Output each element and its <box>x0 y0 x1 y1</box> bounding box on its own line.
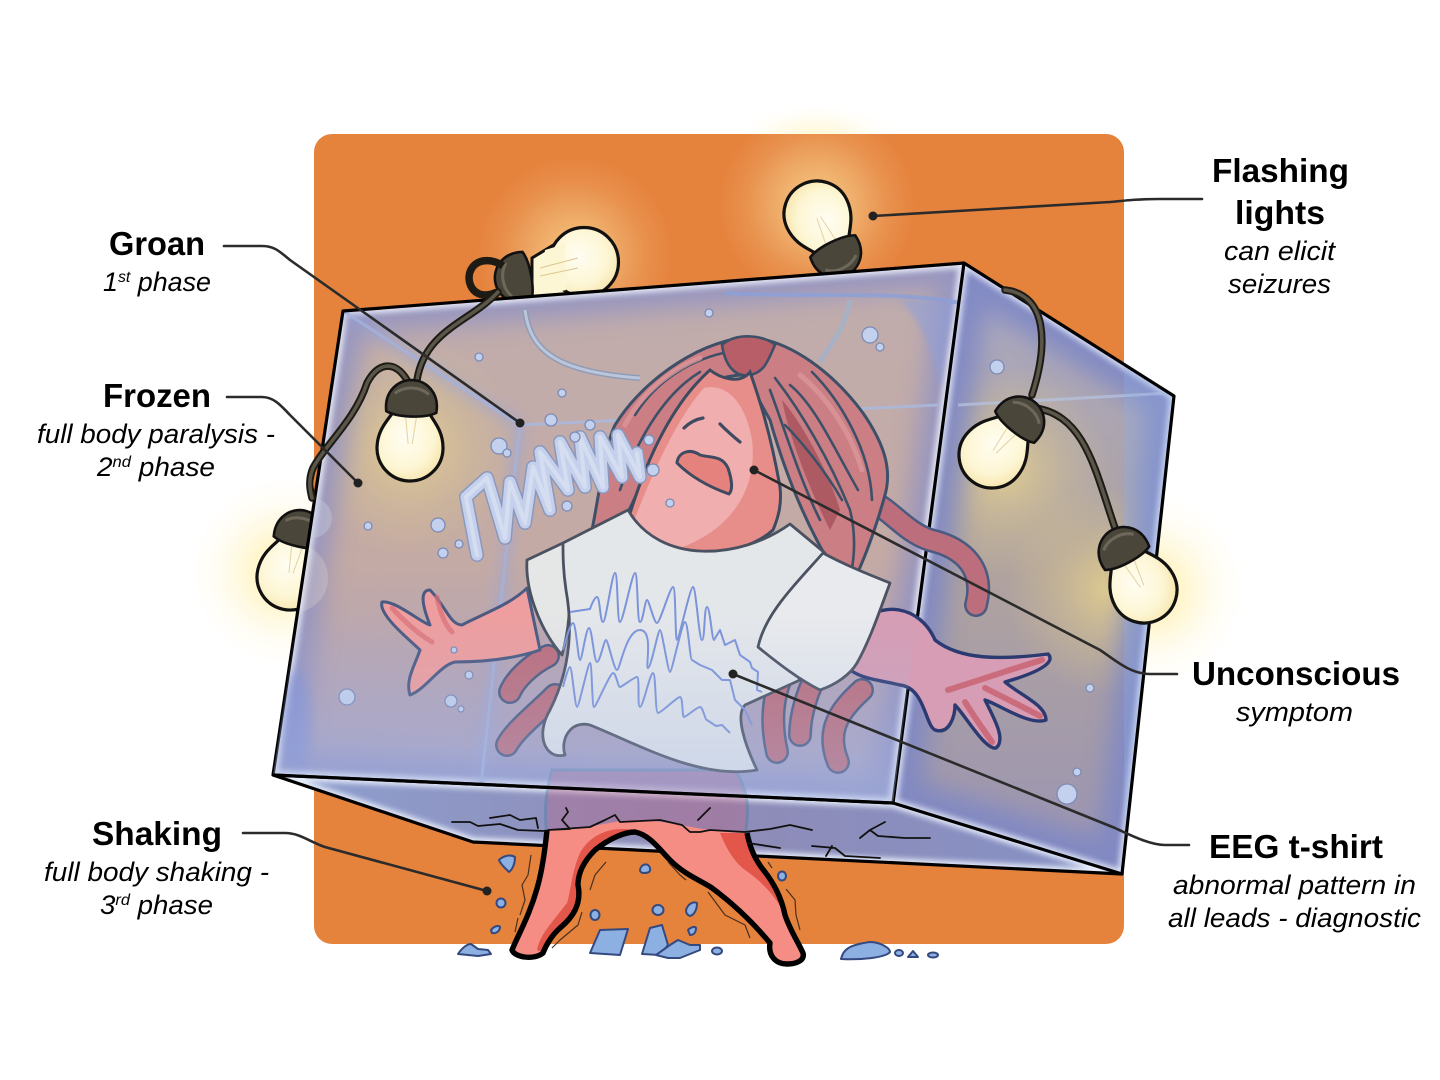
label: EEG t-shirt <box>1168 828 1422 933</box>
character: right arm <box>850 609 1050 748</box>
label: Frozen: Frozen <box>103 377 211 414</box>
label: Groan: 1 <box>103 267 118 297</box>
bulb: top <box>773 170 876 290</box>
label: Shaking: Shaking <box>92 815 222 852</box>
label: Groan: st <box>118 269 131 286</box>
label: Flashing lights: Flashing <box>1212 152 1349 189</box>
cracks on panel <box>515 855 800 948</box>
legs <box>512 820 803 964</box>
orange panel <box>314 134 1124 944</box>
character: head and neck <box>628 370 781 553</box>
ice cube back faces <box>262 263 1215 880</box>
label: EEG t-shirt: EEG t-shirt <box>1209 828 1383 865</box>
label: Flashing lights: seizures <box>1228 269 1331 299</box>
bulb: right lower <box>1083 514 1189 635</box>
label: Shaking: rd <box>115 892 131 909</box>
leader: groan <box>224 246 524 428</box>
character: left arm <box>382 588 540 695</box>
EEG pattern <box>563 573 762 733</box>
cube front edge redraw <box>273 775 893 803</box>
bulb: left lower outer <box>255 508 312 612</box>
label: Shaking <box>44 815 269 920</box>
light glows on panel <box>475 105 1195 650</box>
bulb: right upper <box>946 381 1060 501</box>
cube edges <box>273 263 1174 874</box>
mouth <box>677 452 732 494</box>
background glows <box>190 105 1245 685</box>
leader: unconscious <box>750 466 1177 674</box>
label: EEG t-shirt: abnormal pattern in <box>1173 870 1416 900</box>
bubbles <box>339 309 1094 804</box>
label: Unconscious: symptom <box>1236 697 1353 727</box>
cracks in ice <box>452 808 930 858</box>
ice chunks <box>458 856 938 959</box>
leader: EEG t-shirt <box>728 670 1189 845</box>
bulb: left inner <box>376 379 445 482</box>
label: Frozen: 2 <box>97 452 112 482</box>
leader: flashing lights <box>868 199 1202 220</box>
label: Frozen: full body paralysis - <box>37 419 275 449</box>
label: Frozen: nd <box>113 454 132 471</box>
character: hair <box>592 336 888 572</box>
bulb: top left <box>491 228 618 307</box>
character: hair behind <box>507 500 978 762</box>
character: translucent lower body <box>545 770 748 834</box>
character: t-shirt <box>527 510 890 772</box>
label: Shaking: 3 <box>100 890 115 920</box>
label: Flashing lights: can elicit <box>1224 236 1337 266</box>
leader: frozen <box>227 397 362 488</box>
wires <box>310 290 1115 528</box>
label: Groan: phase <box>130 267 211 297</box>
label: Unconscious: Unconscious <box>1192 655 1400 692</box>
label: Shaking: phase <box>130 890 213 920</box>
groan sound coil <box>466 435 640 555</box>
label: EEG t-shirt: all leads - diagnostic <box>1168 903 1422 933</box>
label: Groan: Groan <box>109 225 205 262</box>
label: Groan <box>103 225 211 297</box>
label: Frozen <box>37 377 275 482</box>
label: Unconscious <box>1192 655 1400 727</box>
label: Shaking: full body shaking - <box>44 857 269 887</box>
leader: shaking <box>243 833 492 896</box>
glass tint over figure <box>273 263 964 803</box>
label: Flashing lights: lights <box>1235 194 1325 231</box>
label: Frozen: phase <box>131 452 215 482</box>
wire loop <box>469 261 503 295</box>
label: Flashing lights <box>1212 152 1349 299</box>
